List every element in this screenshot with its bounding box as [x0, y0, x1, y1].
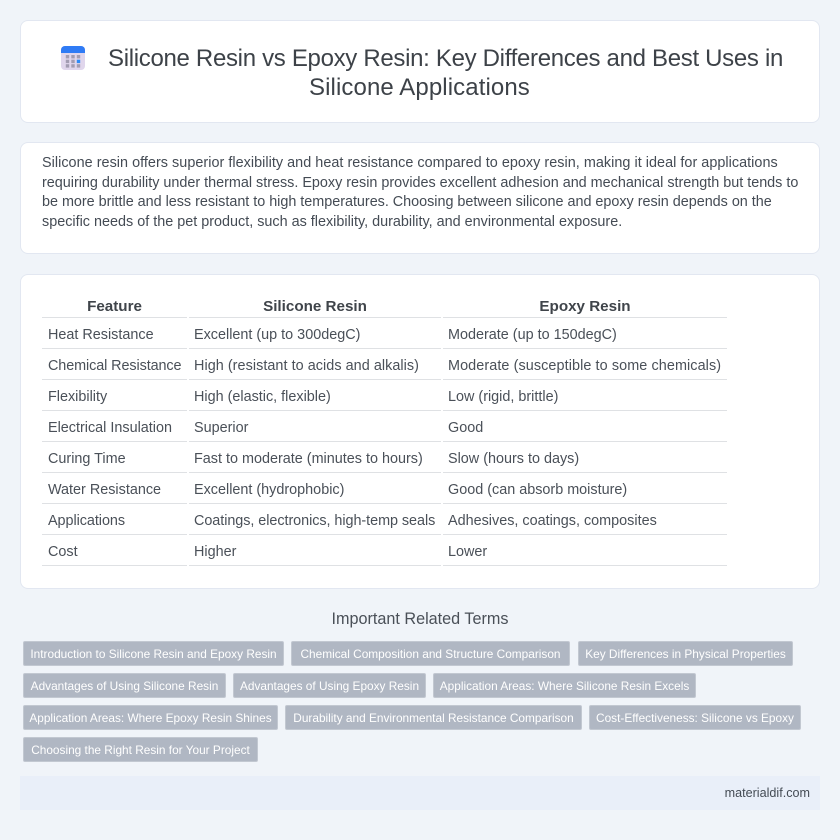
comparison table: Good — [448, 420, 483, 436]
comparison table: Chemical Resistance — [48, 358, 181, 374]
related terms tags: Choosing the Right Resin for Your Project — [31, 743, 250, 757]
comparison table: Heat Resistance — [48, 327, 154, 343]
comparison table: Good (can absorb moisture) — [448, 482, 627, 498]
comparison table: Higher — [194, 544, 236, 560]
comparison table: Cost — [48, 544, 78, 560]
comparison table: Excellent (hydrophobic) — [194, 482, 344, 498]
related terms tags — [23, 641, 801, 762]
comparison table: High (elastic, flexible) — [194, 389, 331, 405]
comparison table: Feature — [87, 298, 142, 315]
icon: calendar — [61, 46, 85, 70]
related terms tags: Application Areas: Where Epoxy Resin Shines — [29, 711, 272, 725]
footer bar — [20, 776, 820, 810]
comparison table: Water Resistance — [48, 482, 161, 498]
related terms tags: Introduction to Silicone Resin and Epoxy Resin — [30, 647, 277, 661]
summary text: be more brittle and less resistant to high temperatures. Choosing between silicone and epoxy resin depends on the — [42, 194, 772, 210]
comparison table: Moderate (up to 150degC) — [448, 327, 617, 343]
comparison table: Adhesives, coatings, composites — [448, 513, 657, 529]
related terms tags: Advantages of Using Epoxy Resin — [240, 679, 419, 693]
related terms tags: Durability and Environmental Resistance Comparison — [293, 711, 574, 725]
summary text — [42, 155, 798, 230]
title — [108, 45, 783, 101]
comparison table: Silicone Resin — [263, 298, 367, 315]
title: Silicone Resin vs Epoxy Resin: Key Differences and Best Uses in — [108, 45, 783, 72]
comparison table — [42, 298, 727, 566]
comparison table panel — [20, 274, 820, 589]
comparison table: Curing Time — [48, 451, 126, 467]
summary text: specific needs of the pet product, such as flexibility, durability, and environmental exposure. — [42, 214, 622, 230]
comparison table: Low (rigid, brittle) — [448, 389, 558, 405]
comparison table: Slow (hours to days) — [448, 451, 579, 467]
comparison table: Electrical Insulation — [48, 420, 172, 436]
footer source text: materialdif.com — [725, 786, 810, 800]
related terms tags: Cost-Effectiveness: Silicone vs Epoxy — [596, 711, 794, 725]
summary text: Silicone resin offers superior flexibility and heat resistance compared to epoxy resin, making it ideal for applications — [42, 155, 778, 171]
comparison table: Fast to moderate (minutes to hours) — [194, 451, 423, 467]
comparison table: Applications — [48, 513, 125, 529]
comparison table: Excellent (up to 300degC) — [194, 327, 360, 343]
comparison table: High (resistant to acids and alkalis) — [194, 358, 419, 374]
summary text: requiring durability under thermal stress. Epoxy resin provides excellent adhesion and mechanical strength but tends to — [42, 174, 798, 190]
header panel — [20, 20, 820, 123]
summary panel — [20, 142, 820, 254]
comparison table: Flexibility — [48, 389, 107, 405]
title: Silicone Applications — [309, 74, 530, 101]
related terms tags: Key Differences in Physical Properties — [585, 647, 786, 661]
comparison table: Epoxy Resin — [539, 298, 631, 315]
related terms tags: Advantages of Using Silicone Resin — [31, 679, 218, 693]
comparison table: Superior — [194, 420, 248, 436]
related terms heading: Important Related Terms — [332, 610, 508, 628]
comparison table: Coatings, electronics, high-temp seals — [194, 513, 435, 529]
related terms tags: Chemical Composition and Structure Comparison — [300, 647, 561, 661]
comparison table: Moderate (susceptible to some chemicals) — [448, 358, 721, 374]
related terms tags: Application Areas: Where Silicone Resin Excels — [440, 679, 689, 693]
comparison table: Lower — [448, 544, 487, 560]
